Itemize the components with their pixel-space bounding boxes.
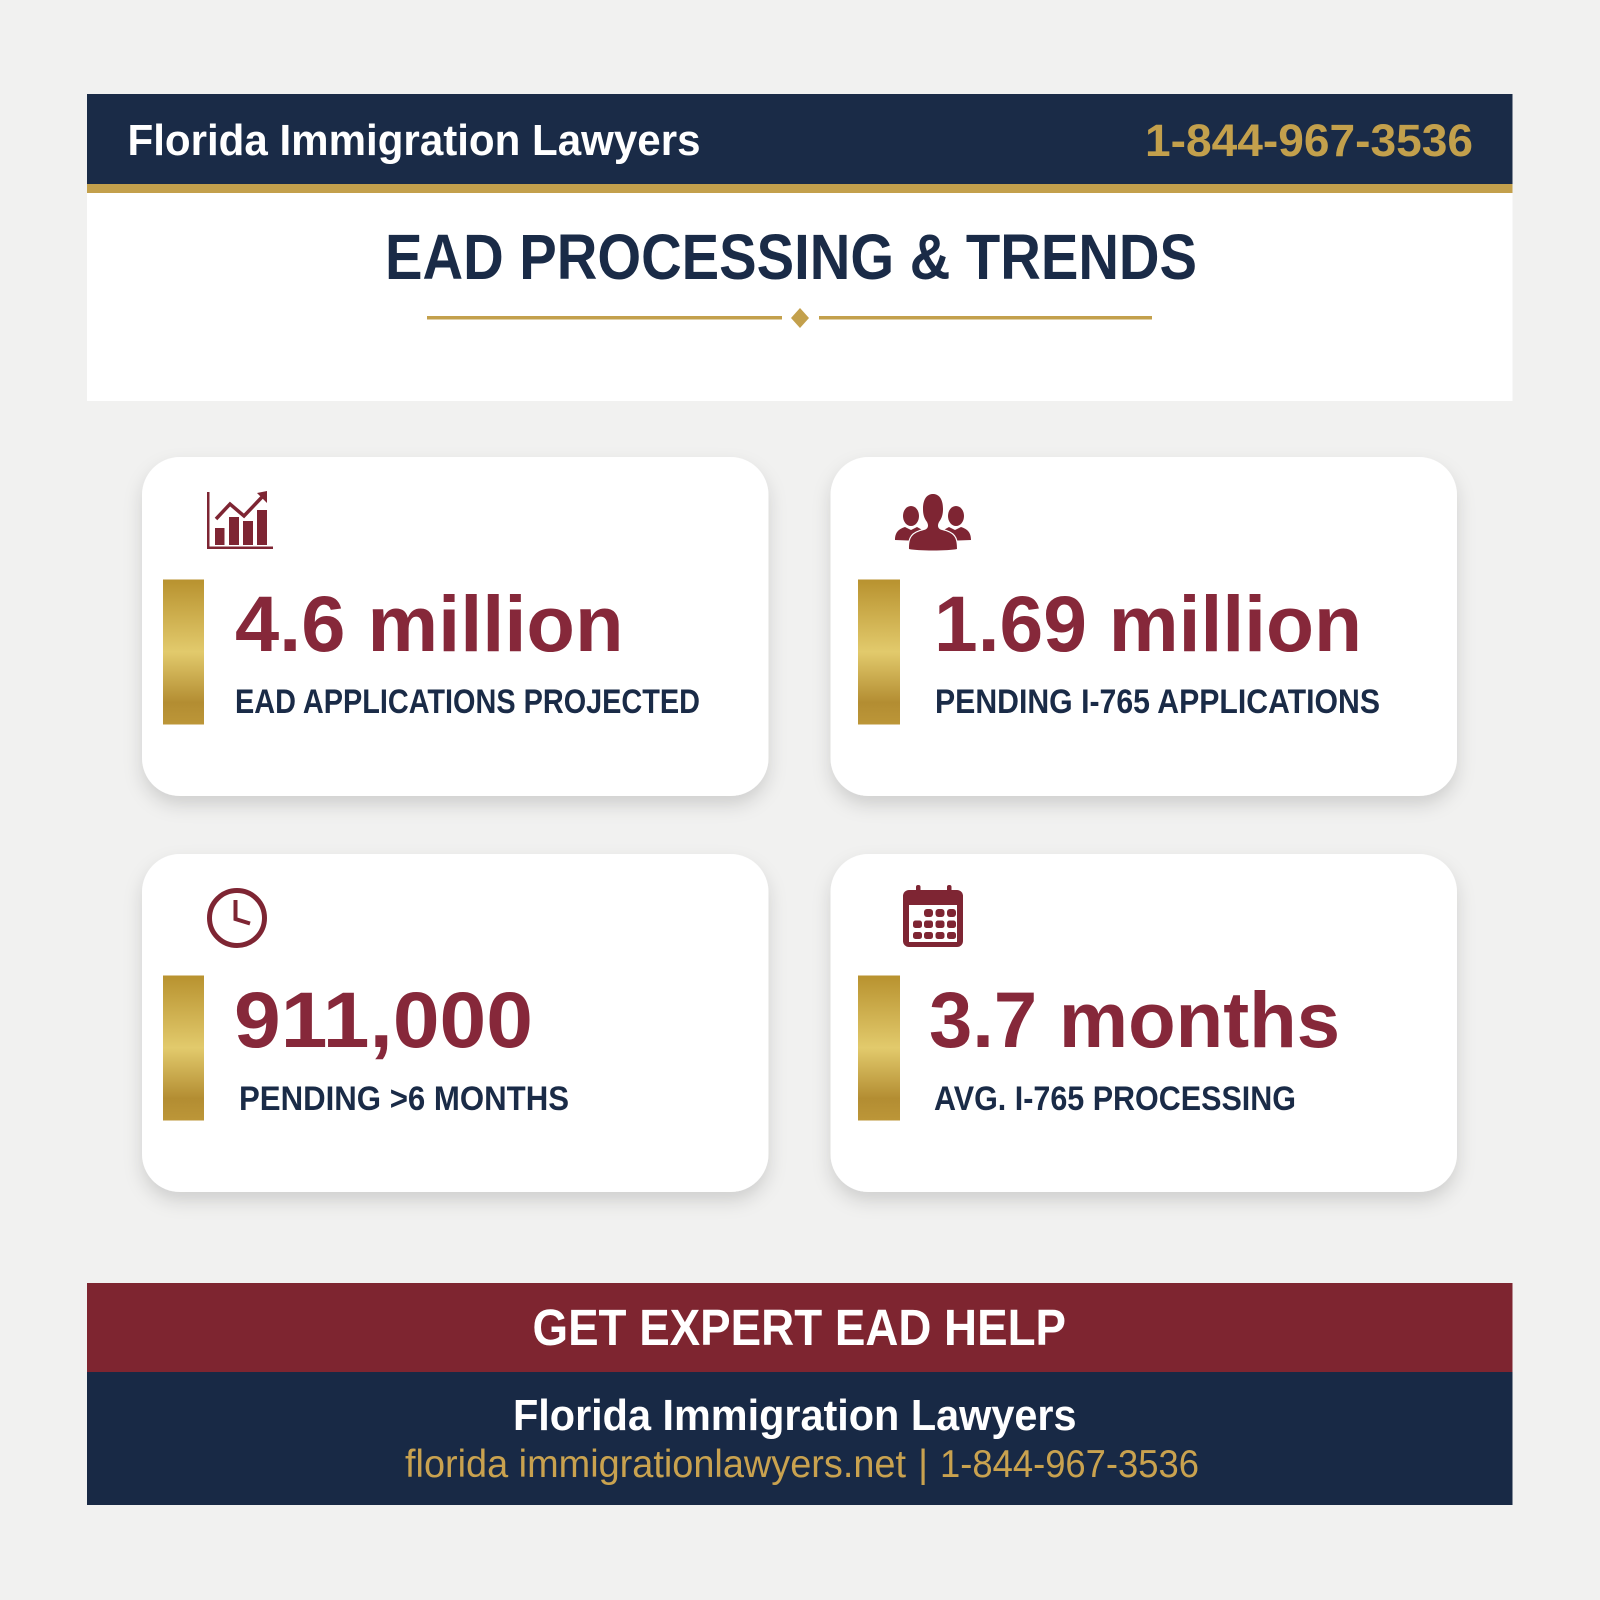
- stat label: PENDING >6 MONTHS: [239, 1080, 569, 1118]
- icon: calendar: [903, 885, 963, 947]
- panel: EAD applications projected: [142, 457, 768, 796]
- call to action band: [87, 1283, 1512, 1372]
- stat label: PENDING I-765 APPLICATIONS: [935, 683, 1380, 721]
- panel: pending over six months: [142, 854, 768, 1192]
- gold accent bar: [858, 580, 900, 724]
- panel: average processing time: [830, 854, 1457, 1192]
- stat value: 1.69 million: [934, 579, 1362, 668]
- icon: rising bar chart: [207, 491, 273, 549]
- website and phone: [405, 1443, 1199, 1486]
- stat value: 911,000: [234, 975, 533, 1064]
- stat label: AVG. I-765 PROCESSING: [934, 1080, 1296, 1118]
- stat label: EAD APPLICATIONS PROJECTED: [235, 683, 700, 721]
- website and phone: 1-844-967-3536: [940, 1443, 1199, 1486]
- firm name: Florida Immigration Lawyers: [513, 1391, 1076, 1440]
- phone number: 1-844-967-3536: [1145, 115, 1473, 166]
- website and phone: florida immigrationlawyers.net: [405, 1443, 906, 1486]
- title: EAD PROCESSING & TRENDS: [385, 221, 1197, 293]
- gold rule: [87, 184, 1512, 193]
- title divider: [427, 308, 1152, 328]
- gold accent bar: [858, 976, 900, 1120]
- contact band: [87, 1372, 1512, 1505]
- website and phone: |: [918, 1443, 928, 1486]
- icon: clock: [210, 890, 264, 946]
- icon: group of people: [895, 494, 971, 550]
- call to action text: GET EXPERT EAD HELP: [532, 1299, 1066, 1356]
- header panel: [87, 94, 1512, 401]
- footer: [87, 1283, 1512, 1505]
- stat value: 3.7 months: [929, 975, 1340, 1064]
- panel: pending I-765 applications: [830, 457, 1457, 796]
- header bar: [87, 94, 1512, 184]
- gold accent bar: [163, 976, 204, 1120]
- stat value: 4.6 million: [235, 579, 624, 668]
- gold accent bar: [163, 580, 204, 724]
- firm name: Florida Immigration Lawyers: [128, 116, 700, 165]
